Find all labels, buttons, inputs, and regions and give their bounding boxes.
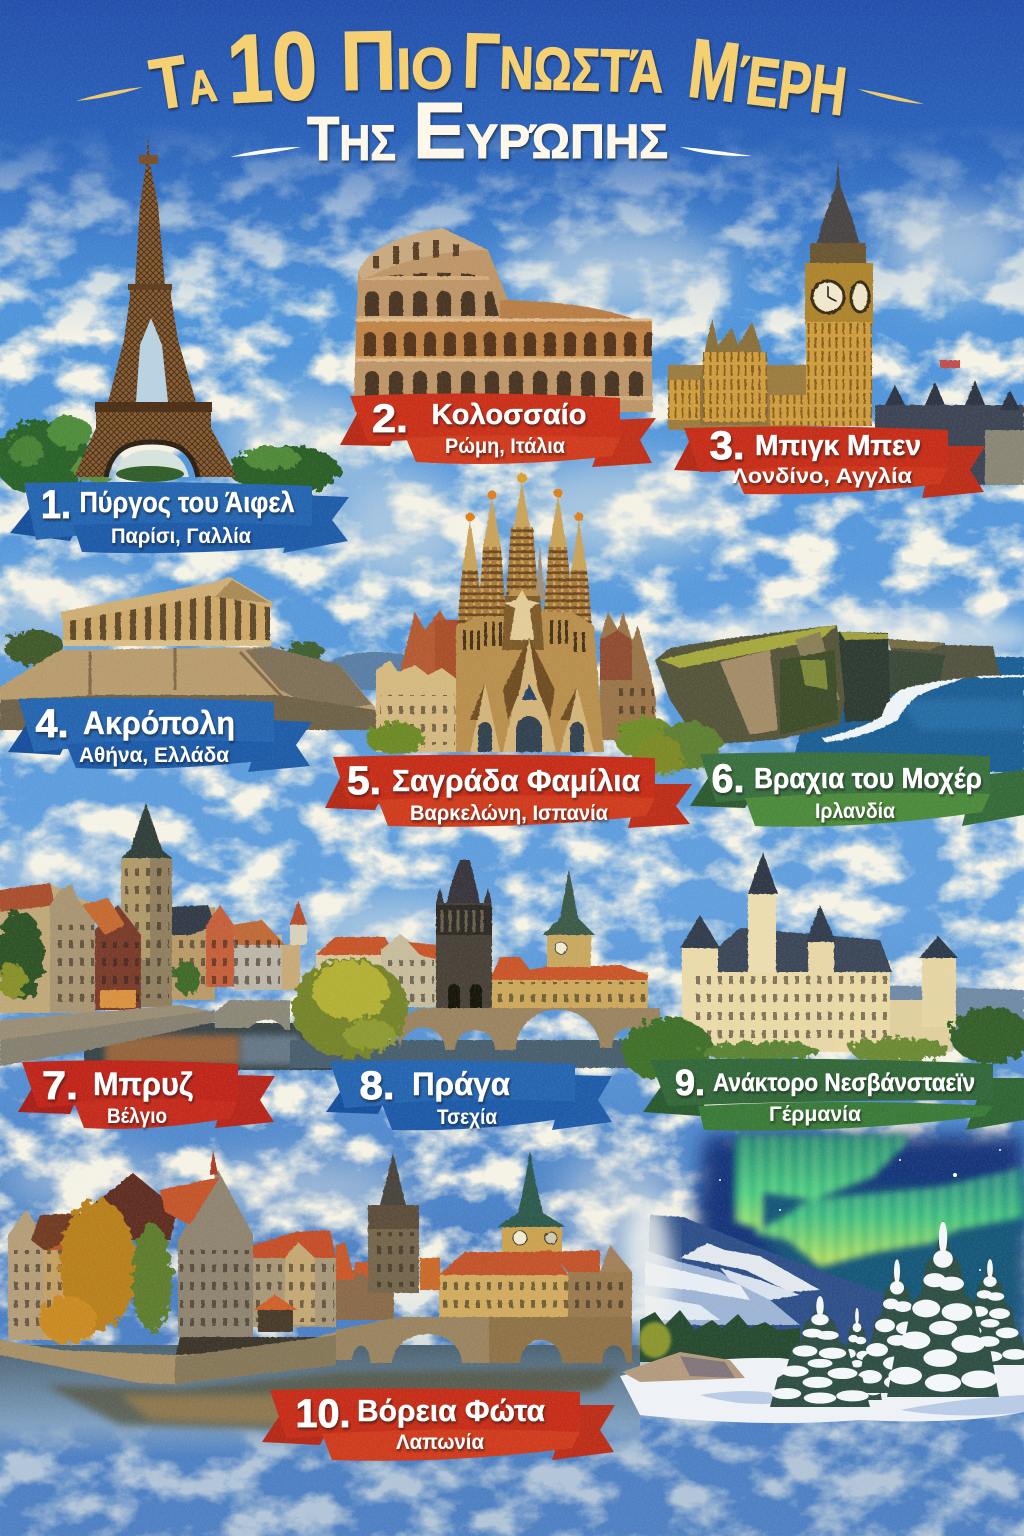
clock tower [121,858,172,1007]
ribbon 3: Big Ben: Λονδίνο, Αγγλία [732,465,912,488]
forest [640,1310,800,1362]
spire banded sections [457,527,592,628]
ribbon 10: Northern Lights: Λαπωνία [396,1431,484,1454]
tower [368,1205,419,1293]
title line 1: ΓΝΩΣΤΆ [462,16,665,109]
golden hall [439,1272,568,1318]
ribbon 5: Sagrada Familia: Βαρκελώνη, Ισπανία [410,802,608,825]
ribbon 2: Colosseum: Ρώμη, Ιτάλια [445,435,565,458]
ribbon 9: Neuschwanstein: Ανάκτορο Νεσβάνσταεϊν [713,1069,975,1097]
water [0,1345,640,1457]
trees [0,911,200,999]
ribbon 7: Bruges: 7. [42,1064,78,1108]
ribbon 7: Bruges: Μπρυζ [93,1066,193,1102]
ribbon 3: Big Ben [674,424,985,498]
snowy mountains [645,1215,890,1345]
town buildings [8,1150,632,1340]
ribbon 1: Eiffel Tower: Παρίσι, Γαλλία [111,525,251,548]
middle houses [253,1257,336,1327]
bridge tower [436,903,492,1010]
bridge [396,1008,660,1050]
ribbon 5: Sagrada Familia: Σαγράδα Φαμίλια [392,763,640,798]
ribbon 4: Acropolis: Αθήνα, Ελλάδα [79,744,229,767]
ribbon 4: Acropolis: Ακρόπολη [83,705,235,741]
ribbon 9: Neuschwanstein: Γέρμανία [769,1103,861,1126]
ribbon 6: Cliffs of Moher: Βραχια του Μοχέρ [754,763,982,795]
landmark 2: Colosseum [354,228,653,412]
title line 1: ΠΙΟ [340,12,453,108]
ribbon 7: Bruges [18,1060,275,1129]
aurora curtains [735,1135,1024,1267]
landmark 5: Sagrada Familia [365,473,675,760]
title line 2: ΤΗΣ [307,105,396,174]
landmark 7: Bruges [0,803,332,1070]
quay and bridge [0,1005,215,1042]
yellow hall [492,972,648,1008]
Parliament towers [668,318,808,430]
title [145,10,852,175]
ribbon 9: Neuschwanstein [643,1059,1024,1131]
title line 1 [145,10,852,133]
buildings right of tower [875,360,1024,485]
ribbon 10: Northern Lights: 10. [296,1392,350,1436]
title line 2: ΕΥΡΏΠΗΣ [413,86,668,175]
trees around tower [0,416,341,496]
ribbon 7: Bruges: Βέλγιο [107,1105,167,1128]
rock [622,1352,745,1382]
ribbon 3: Big Ben: Μπιγκ Μπεν [755,430,921,462]
ribbon 6: Cliffs of Moher: 6. [712,757,744,801]
ribbon 8: Prague [326,1060,612,1130]
ribbon 1: Eiffel Tower: Πύργος του Άιφελ [80,487,294,519]
snowy pines [770,1220,1024,1407]
landmark 3: Big Ben and Parliament [668,158,1024,485]
ribbon 2: Colosseum: Κολοσσαίο [432,399,586,431]
facade [456,590,604,752]
landmark 1: Eiffel Tower [0,135,341,496]
side buildings [376,610,656,752]
title line 1: 10 [224,10,320,124]
ribbon 4: Acropolis [8,698,312,772]
ribbon 10: Northern Lights [262,1388,615,1461]
ribbon 6: Cliffs of Moher: Ιρλανδία [815,800,895,823]
ribbon 8: Prague: Τσεχία [437,1106,497,1129]
landmark 10: town and northern lights [0,1135,1024,1457]
clock tower [805,158,873,426]
left houses [316,950,386,1010]
foam [822,678,965,742]
finials [466,473,584,522]
ribbon 8: Prague: Πράγα [412,1066,510,1102]
ribbon 1: Eiffel Tower: 1. [41,483,71,527]
landmark 9: Neuschwanstein Castle [622,852,1024,1082]
ribbon 5: Sagrada Familia: 5. [347,759,381,803]
central small spire [535,545,545,600]
tree [292,958,408,1058]
right houses [172,907,215,1000]
ribbon 6: Cliffs of Moher [690,752,1024,827]
left houses [8,1210,44,1340]
title line 1: ΤΑ [145,37,221,126]
spire upper tips [462,482,587,570]
landmark 4: Acropolis [0,577,405,730]
landmark 6: Cliffs of Moher [636,613,1024,775]
far cliffs [888,639,1000,690]
trees [365,716,675,760]
ribbon 4: Acropolis: 4. [36,702,68,746]
snowy ground [620,1352,1024,1423]
ribbon 2: Colosseum [340,393,656,467]
ribbon 8: Prague: 8. [360,1064,394,1108]
ribbon 2: Colosseum: 2. [372,397,408,441]
ribbon 3: Big Ben: 3. [710,424,744,468]
ribbon 10: Northern Lights: Βόρεια Φώτα [357,1393,545,1428]
aurora night sky [696,1135,1024,1350]
ribbon 1: Eiffel Tower [10,482,349,553]
autumn trees [40,1199,172,1344]
title flourishes [76,87,924,157]
clock tower [547,935,591,967]
left shrubs [636,721,722,775]
ribbon 9: Neuschwanstein: 9. [675,1062,705,1103]
horizon haze [660,613,1024,657]
quay and bridge [0,1317,632,1384]
landmark 8: Prague [290,860,660,1068]
title line 1: ΜΈΡΗ [684,21,852,133]
ribbon 5: Sagrada Familia [325,755,692,828]
big gable [80,1173,178,1240]
clock tower [502,1225,562,1252]
water reflections [45,1368,620,1430]
canal water [84,1023,332,1070]
main cliff [655,625,845,745]
left houses [0,884,95,1013]
cloud edge over mountain [624,1200,672,1340]
sea [790,657,1024,772]
